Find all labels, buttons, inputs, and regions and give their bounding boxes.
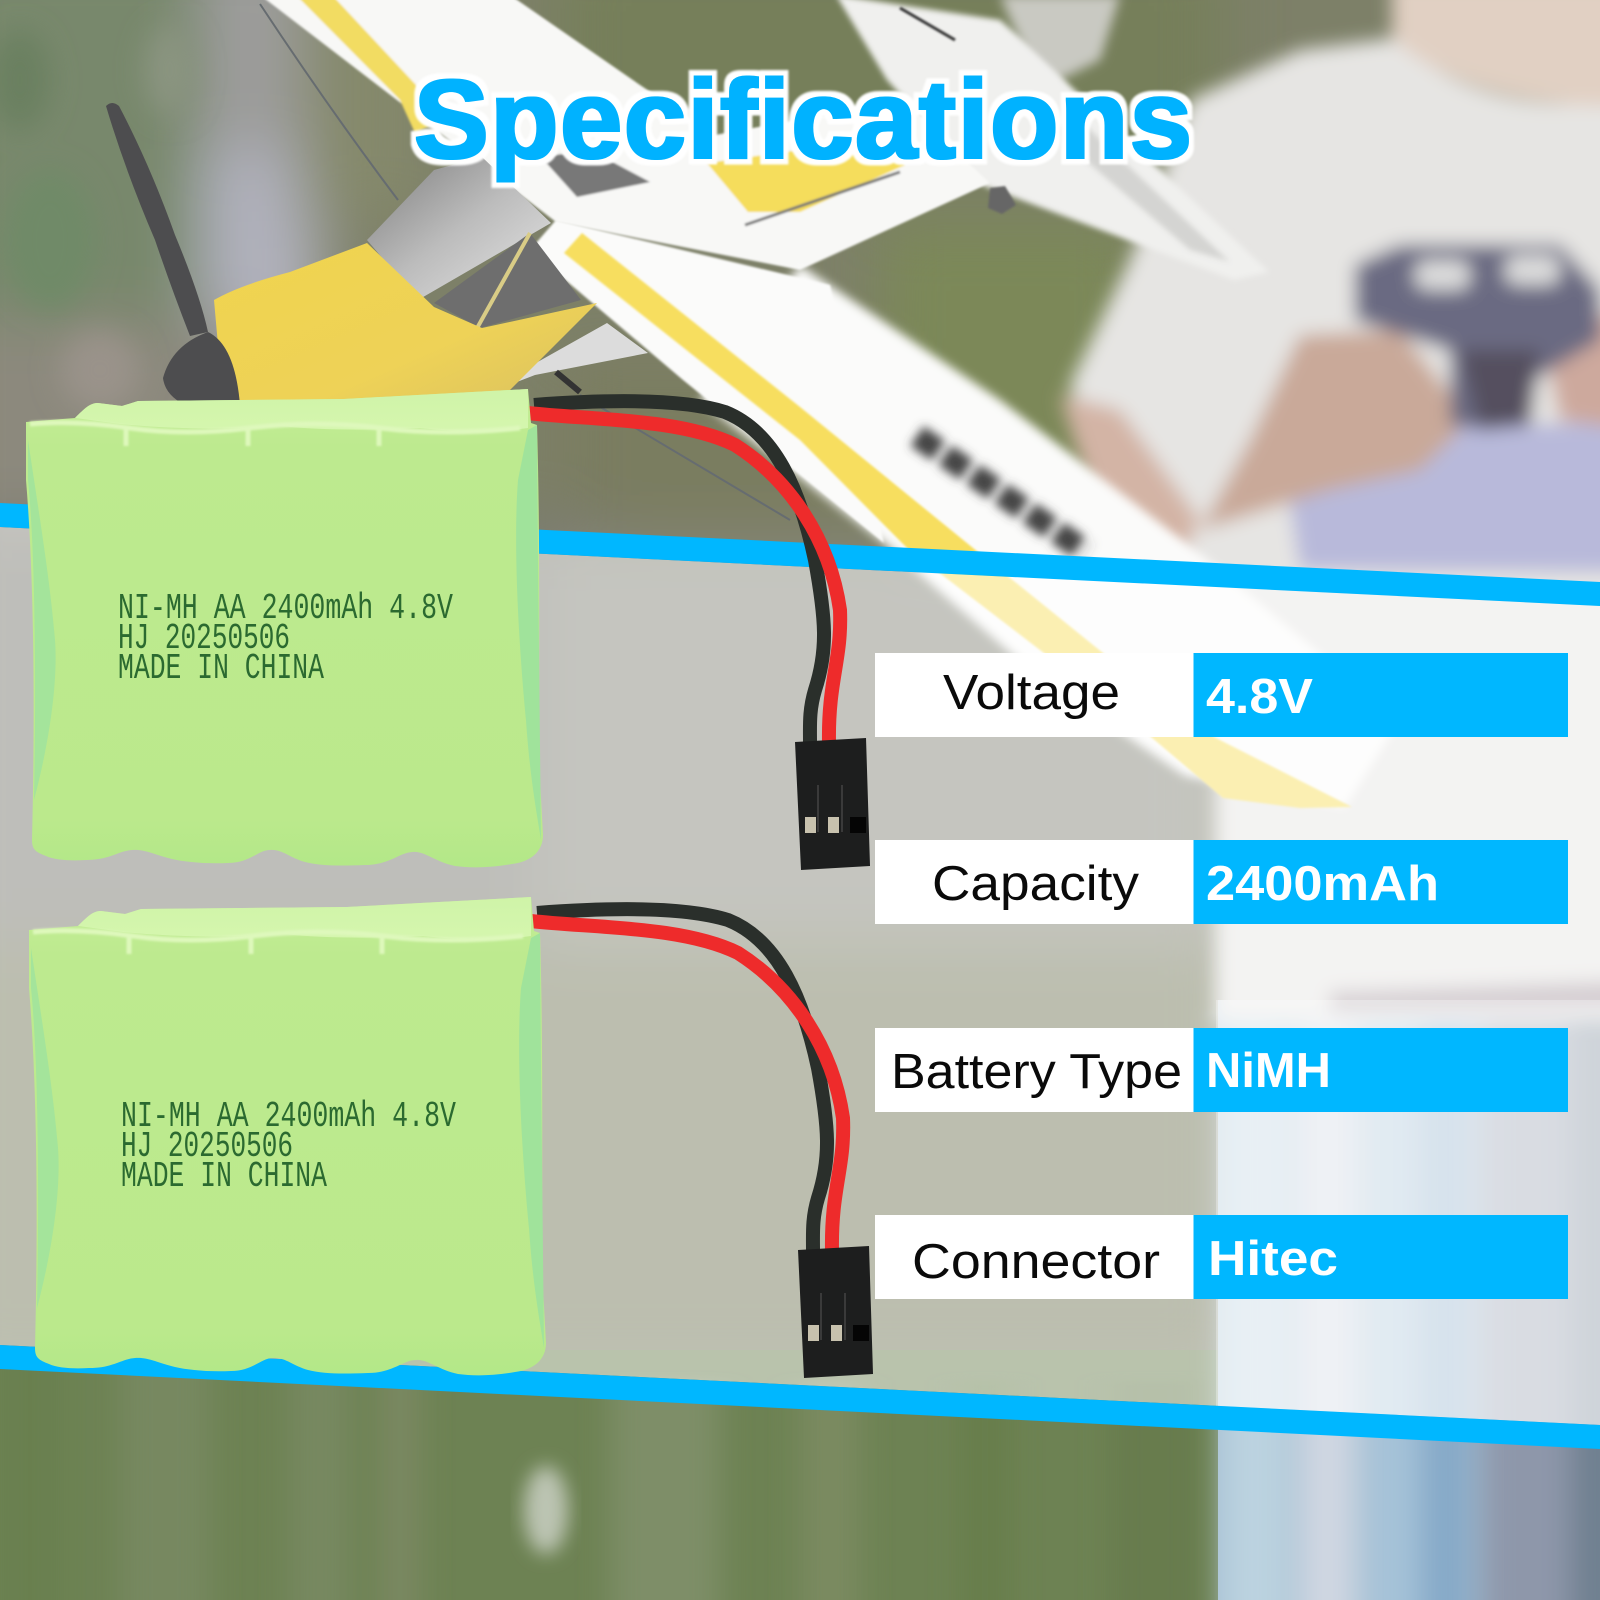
- battery pack top: [26, 389, 870, 870]
- wires: [531, 909, 843, 1250]
- spec row: capacity: 2400mAh: [1206, 857, 1439, 911]
- grass streaks: [0, 1350, 1240, 1600]
- battery print: [118, 588, 453, 689]
- spec row: battery type: NiMH: [1206, 1044, 1331, 1098]
- jeans: [1218, 1000, 1600, 1600]
- plane near wing: [530, 220, 1400, 808]
- battery body: [26, 389, 543, 867]
- spec row: battery type: [875, 1028, 1568, 1112]
- battery print: HJ 20250506: [118, 618, 290, 659]
- spec row: connector: [875, 1215, 1568, 1299]
- plane far wing and body: [260, 0, 990, 270]
- spec row: connector: Connector: [912, 1235, 1160, 1289]
- wires: [528, 401, 840, 742]
- spec row: capacity: [875, 840, 1568, 924]
- battery print: NI-MH AA 2400mAh 4.8V: [118, 588, 453, 629]
- battery body: [29, 897, 546, 1375]
- plane nose and fuselage: [214, 243, 648, 410]
- connector plug: [798, 1246, 873, 1378]
- battery print: [121, 1096, 456, 1197]
- spec row: battery type: Battery Type: [891, 1045, 1182, 1099]
- spec row: connector: Hitec: [1208, 1232, 1338, 1286]
- person shirt: [1060, 0, 1600, 1020]
- title: Specifications: [414, 57, 1192, 182]
- spec row: voltage: [875, 653, 1568, 737]
- plane tail: [836, 0, 1269, 280]
- battery print: NI-MH AA 2400mAh 4.8V: [121, 1096, 456, 1137]
- pale wash panel between bands: [0, 527, 1600, 1425]
- connector plug: [795, 738, 870, 870]
- battery print: HJ 20250506: [121, 1126, 293, 1167]
- battery print: MADE IN CHINA: [121, 1156, 327, 1197]
- plane cabin: [367, 157, 581, 330]
- extra wash over jeans: [1216, 1000, 1600, 1425]
- top diagonal blue band: [0, 503, 1600, 606]
- battery pack bottom: [29, 897, 873, 1378]
- spec row: capacity: Capacity: [932, 857, 1140, 911]
- spec row: voltage: Voltage: [943, 666, 1120, 720]
- landing wires behind battery: [260, 4, 790, 520]
- propeller: [106, 103, 240, 405]
- spec row: voltage: 4.8V: [1206, 670, 1313, 724]
- battery print: MADE IN CHINA: [118, 648, 324, 689]
- bottom diagonal blue band: [0, 1345, 1600, 1449]
- plane fin: [988, 186, 1016, 214]
